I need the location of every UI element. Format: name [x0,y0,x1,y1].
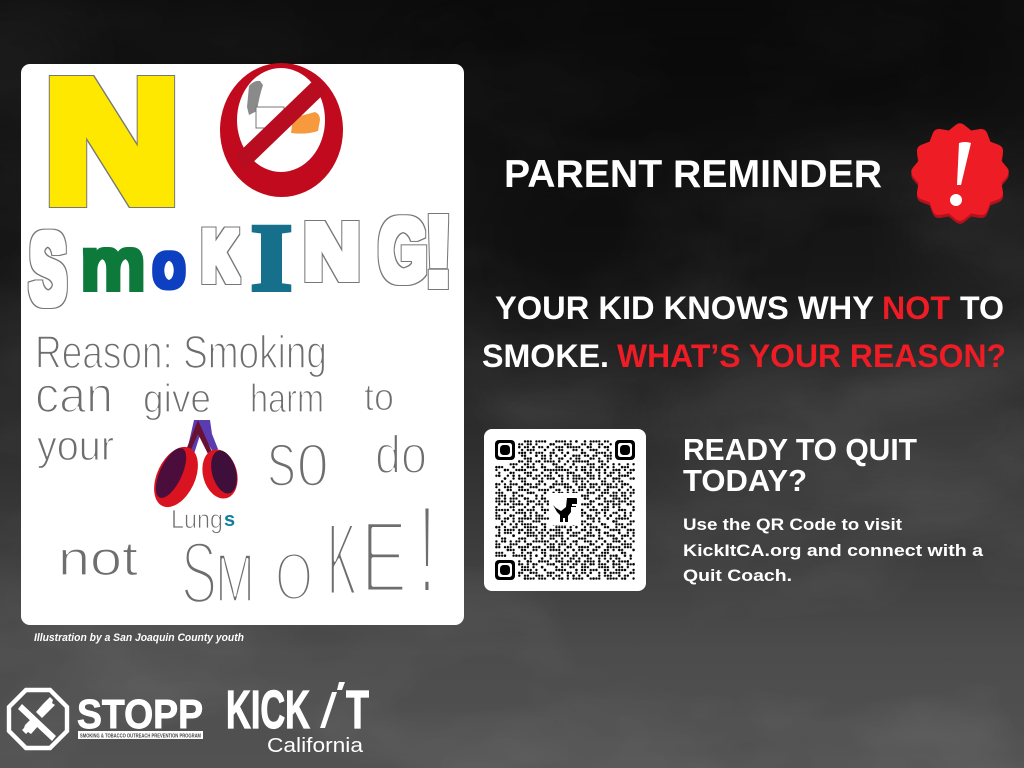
headline: your kid knows: YOUR KID KNOWS WHY [495,290,874,326]
drawing: word SMOKING [30,196,454,326]
text: handwritten reason: so [267,414,329,503]
headline: your kid knows [482,290,1006,374]
caption: illustration credit: Illustration by a San Joaquin County youth [34,632,244,644]
QR finder top right [615,440,635,460]
drawing: yellow letter N: N [43,44,181,238]
drawing: word SMOKING: m [80,222,146,307]
drawing: word SMOKING: S [30,212,66,326]
subheading: ready to quit [683,432,917,498]
logo: STOPP: STOPP [77,691,203,737]
subheading: ready to quit: READY TO QUIT [683,432,917,467]
logo: Kick It California: T [346,680,369,740]
text: QR instructions: KickItCA.org and connect with a [683,541,984,560]
QR code card [484,429,646,591]
text: not smoke: S [181,523,217,622]
heading: parent reminder: PARENT REMINDER [504,153,882,196]
text: handwritten reason: harm [250,377,324,421]
text: lungs label: Lung [171,504,223,534]
text: handwritten reason [35,326,427,503]
text: not smoke: M [215,539,255,617]
icon: octagon no vaping [9,690,67,748]
drawing: word SMOKING: o [152,228,186,302]
text: not smoke: E [361,500,407,614]
text: QR instructions: Use the QR Code to visit [683,515,902,534]
headline: your kid knows: WHAT’S YOUR REASON? [617,338,1006,374]
text: handwritten reason: can [35,367,113,423]
text: QR instructions [683,515,984,585]
text: handwritten reason: to [364,377,394,419]
subheading: ready to quit: TODAY? [683,463,807,498]
logo: STOPP [9,690,203,748]
text: handwritten reason: do [375,425,427,485]
icon: red alert badge [918,130,1002,217]
icon: dinosaur [553,498,577,522]
text: handwritten reason: Reason: Smoking [35,326,327,378]
drawing: word SMOKING: N [303,207,361,296]
text: not smoke: K [327,502,357,618]
text: handwritten reason: give [143,377,211,421]
panel: child's drawing: ! [420,481,434,619]
icon: no smoking sign [220,63,343,197]
logo: STOPP: SMOKING & TOBACCO OUTREACH PREVENTION PROGRAM [80,734,201,740]
text: lungs label: s [224,509,235,531]
logo: Kick It California: California [267,735,364,757]
text: not smoke: not [58,533,138,586]
text: handwritten reason: your [37,422,114,469]
drawing: word SMOKING: ! [423,196,454,308]
drawing: word SMOKING: K [202,216,238,297]
drawing: word SMOKING: G [379,201,427,301]
panel: child's drawing [21,44,464,625]
icon: drawn lungs [145,420,243,514]
text: not smoke [58,481,434,622]
headline: your kid knows: TO [960,290,1004,326]
logo: Kick It California: KICK [226,680,310,740]
headline: your kid knows: NOT [882,290,950,326]
text: not smoke: O [275,539,313,615]
headline: your kid knows: SMOKE. [482,338,609,374]
QR finder bottom left [495,560,515,580]
drawing: word SMOKING: I [250,204,293,311]
QR finder top left [495,440,515,460]
text: QR instructions: Quit Coach. [683,566,792,585]
